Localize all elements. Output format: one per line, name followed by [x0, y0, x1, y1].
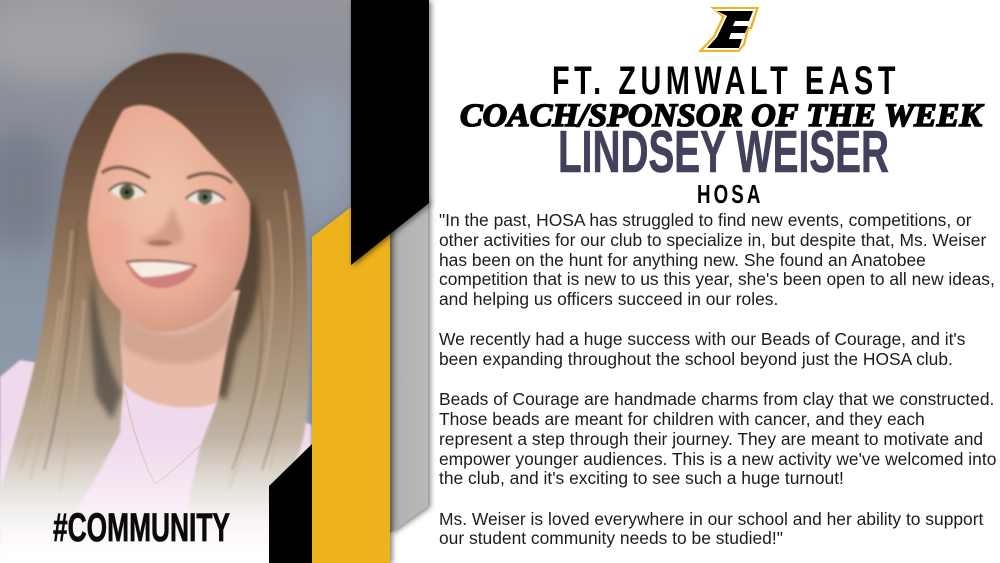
- quote text: been expanding throughout the school beyond just the HOSA club.: [439, 349, 953, 369]
- shirt: [0, 360, 312, 563]
- school logo: [698, 7, 759, 52]
- quote text: other activities for our club to specialize in, but despite that, Ms. Weiser: [439, 230, 986, 250]
- grey stripe: [390, 200, 428, 533]
- under hair shadow right: [218, 195, 261, 400]
- cheek colour: [94, 218, 130, 262]
- cheek colour right: [204, 218, 240, 262]
- quote text: [439, 210, 996, 548]
- hashtag: #COMMUNITY: [53, 506, 230, 550]
- quote text: the club, and it's exciting to see such a huge turnout!: [439, 468, 844, 488]
- mouth: [126, 260, 197, 288]
- necklace: [125, 390, 200, 484]
- top black stripe: [351, 0, 429, 265]
- fade to white: [0, 450, 296, 563]
- quote text: Those beads are meant for children with cancer, and they each: [439, 409, 925, 429]
- nose: [140, 205, 183, 247]
- quote text: Beads of Courage are handmade charms from clay that we constructed.: [439, 389, 994, 409]
- eyebrows: [102, 167, 232, 183]
- hair: [0, 53, 309, 535]
- quote text: has been on the hunt for anything new. She found an Anatobee: [439, 250, 926, 270]
- quote text: "In the past, HOSA has struggled to find new events, competitions, or: [439, 210, 972, 230]
- club name: HOSA: [697, 179, 760, 209]
- eyes: [109, 183, 225, 204]
- quote text: Ms. Weiser is loved everywhere in our school and her ability to support: [439, 509, 984, 529]
- chin shadow: [118, 295, 236, 364]
- school name: FT. ZUMWALT EAST: [552, 58, 895, 103]
- quote text: empower younger audiences. This is a new activity we've welcomed into: [439, 449, 996, 469]
- quote text: represent a step through their journey. They are meant to motivate and: [439, 429, 983, 449]
- neck: [120, 290, 240, 407]
- award heading: COACH/SPONSOR OF THE WEEK: [460, 98, 984, 134]
- lower black stripe: [269, 444, 312, 563]
- quote text: and helping us officers succeed in our roles.: [439, 289, 778, 309]
- quote text: competition that is new to us this year, she's been open to all new ideas,: [439, 269, 995, 289]
- portrait photo: [0, 0, 360, 563]
- quote text: We recently had a huge success with our Beads of Courage, and it's: [439, 329, 966, 349]
- under hair shadow left: [90, 270, 122, 420]
- photo backdrop: [0, 0, 360, 563]
- gold stripe: [312, 207, 390, 563]
- face: [88, 105, 250, 332]
- quote text: our student community needs to be studied!": [439, 528, 783, 548]
- hair streaks: [20, 190, 293, 490]
